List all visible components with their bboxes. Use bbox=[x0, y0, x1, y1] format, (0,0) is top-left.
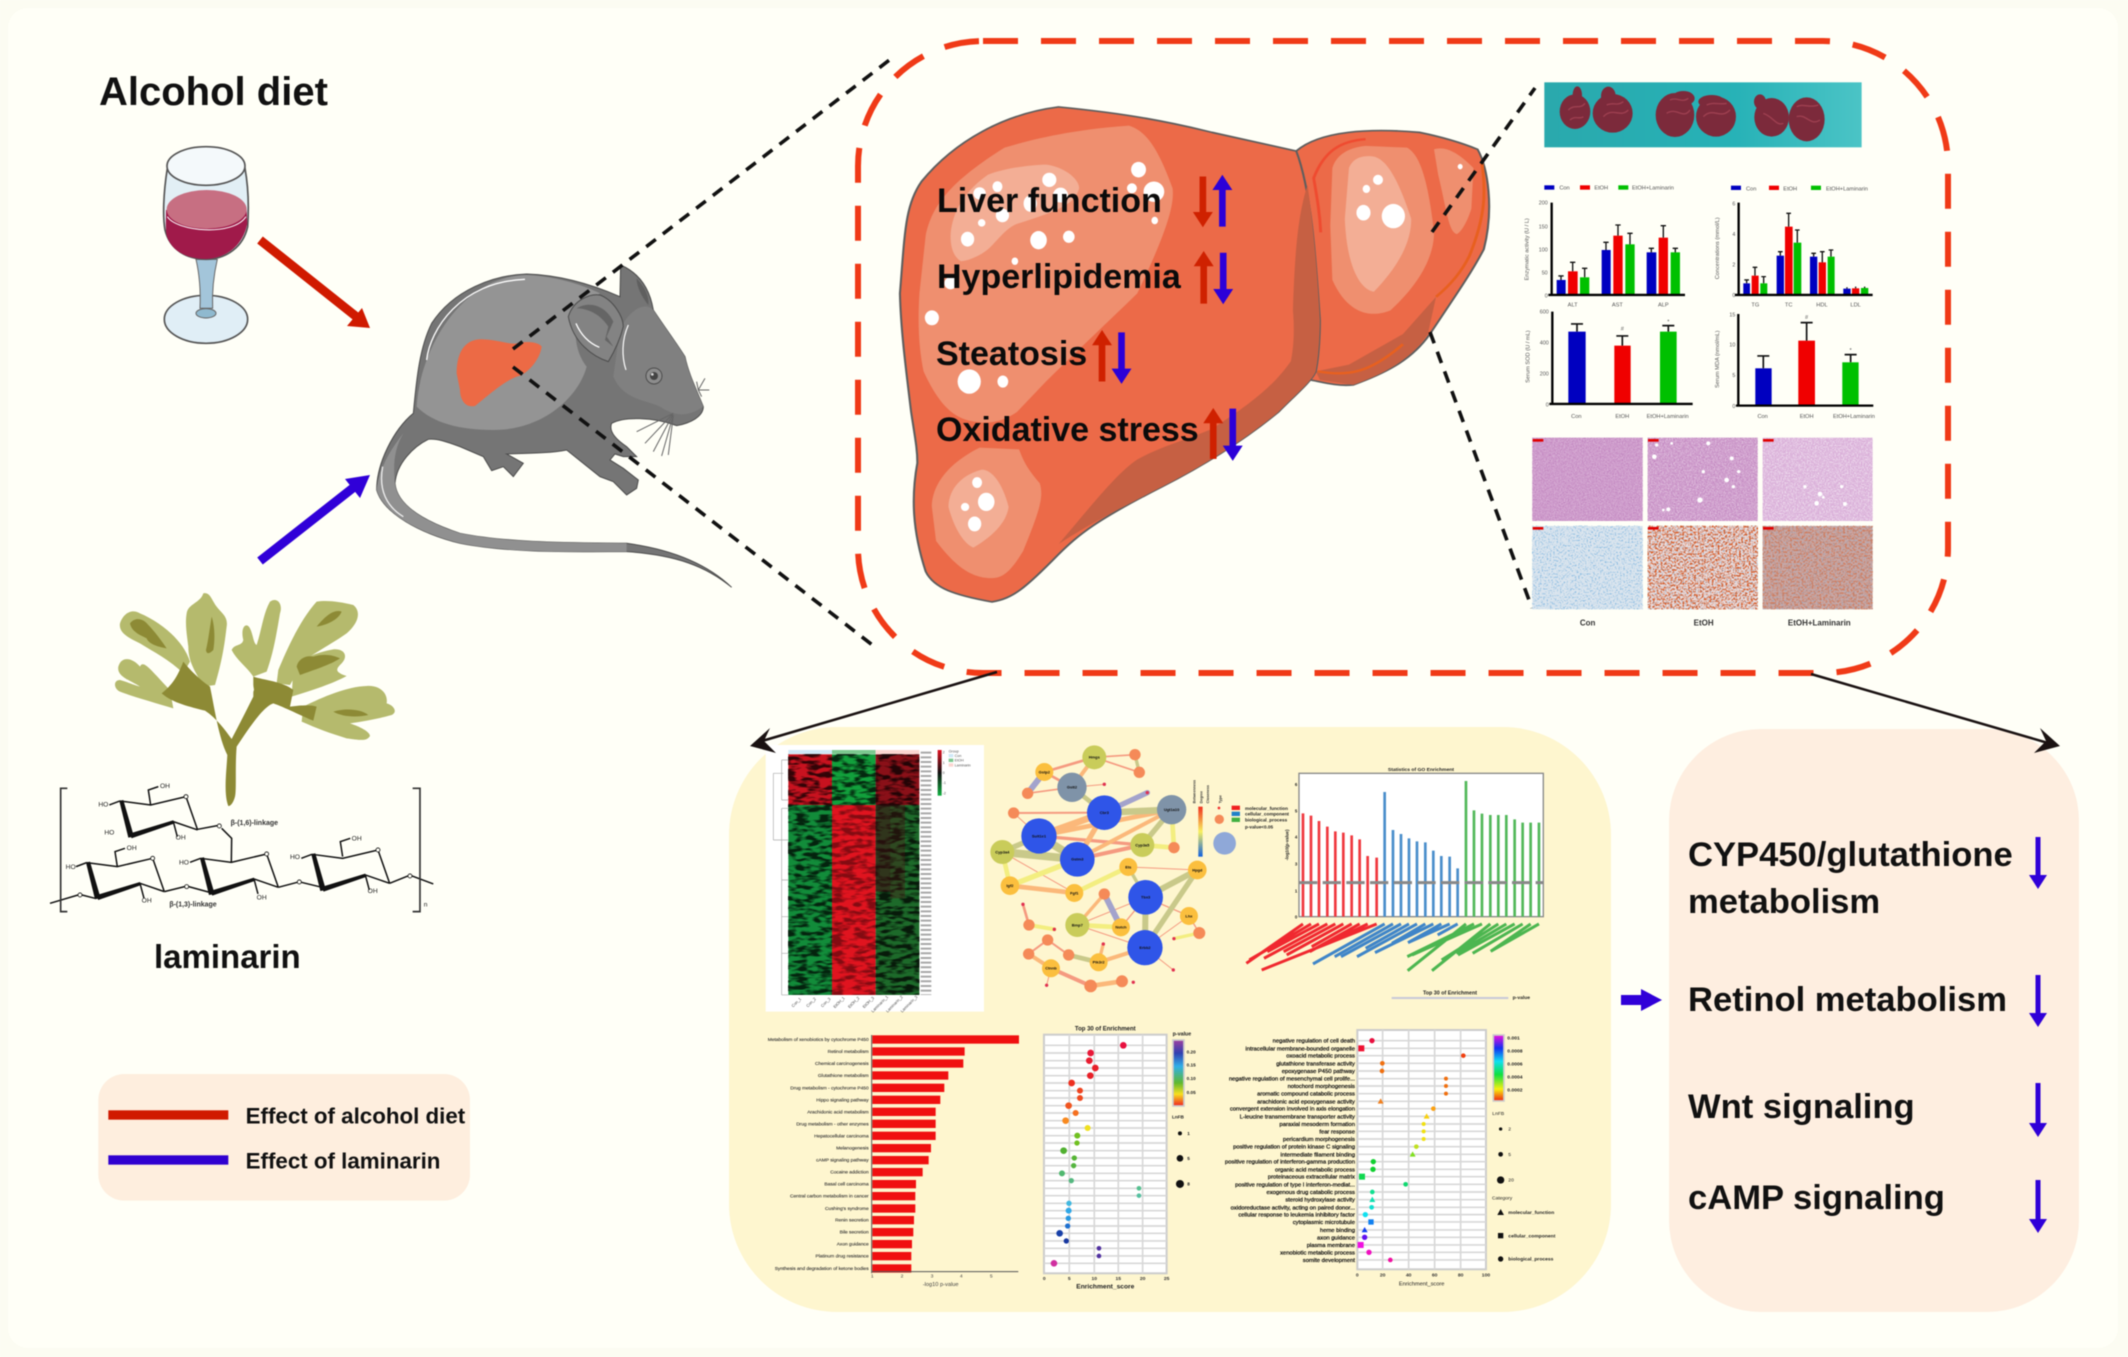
chart: enzymatic activity: Enzymatic activity (U / L) bbox=[1524, 218, 1530, 280]
chart: KEGG pathway bars: Axon guidance bbox=[837, 1242, 869, 1248]
chart: GO enrichment dot plot: biological_process bbox=[1508, 1257, 1554, 1263]
chart: KEGG pathway bars: 5 bbox=[990, 1273, 993, 1279]
chart: GO enrichment dot plot: 0.0008 bbox=[1507, 1048, 1523, 1054]
chart: GO enrichment statistics bars: 6 bbox=[1295, 782, 1298, 787]
panel: downregulated pathways bbox=[1669, 729, 2079, 1312]
chart: KEGG pathway bars: Melanogenesis bbox=[836, 1146, 869, 1152]
chart: KEGG pathway bars: 4 bbox=[960, 1273, 963, 1279]
chart: GO enrichment dot plot: arachidonic acid epoxygenase activity bbox=[1257, 1099, 1355, 1105]
chart: KEGG pathway bars: Bile secretion bbox=[840, 1230, 869, 1236]
chart: gene network: Cyp3a4 bbox=[995, 849, 1010, 854]
chart: KEGG enrichment dot plot: Enrichment_score bbox=[1076, 1284, 1135, 1291]
chart: KEGG pathway bars: Retinol metabolism bbox=[828, 1049, 869, 1055]
chemical structure: laminarin: OH bbox=[127, 845, 137, 852]
chart: enzymatic activity: Con bbox=[1559, 186, 1570, 192]
chart: KEGG pathway bars: Cocaine addiction bbox=[830, 1170, 869, 1176]
chart: GO enrichment dot plot: 40 bbox=[1406, 1273, 1412, 1279]
chart: GO enrichment dot plot: cytoplasmic microtubule bbox=[1293, 1220, 1355, 1226]
liver effect: Oxidative stress bbox=[936, 408, 1243, 461]
chemical structure: laminarin bbox=[50, 783, 433, 912]
chemical structure: laminarin: OH bbox=[160, 783, 170, 790]
chemical structure: laminarin: HO bbox=[179, 859, 189, 866]
chart: serum SOD: 600 bbox=[1540, 310, 1549, 316]
chart: KEGG enrichment dot plot bbox=[1043, 1027, 1196, 1291]
chemical structure: laminarin: β-(1,3)-linkage bbox=[169, 902, 217, 909]
chart: GO enrichment statistics bars: p-value bbox=[1513, 995, 1530, 1001]
chart: enzymatic activity: 50 bbox=[1542, 271, 1548, 277]
liver effect: Oxidative stress: Oxidative stress bbox=[936, 411, 1199, 449]
chart: gene network: Degree bbox=[1199, 791, 1203, 803]
chart: gene network: Type bbox=[1218, 795, 1222, 803]
chart: lipid concentrations: 0 bbox=[1732, 293, 1735, 299]
chart: lipid concentrations: LDL bbox=[1850, 302, 1861, 308]
chart: GO enrichment statistics bars: 4 bbox=[1295, 835, 1298, 840]
chart: enzymatic activity: ALP bbox=[1658, 302, 1669, 308]
chart: KEGG pathway bars: 3 bbox=[931, 1273, 934, 1279]
chart: GO enrichment dot plot: 100 bbox=[1482, 1273, 1490, 1279]
chemical structure: laminarin: HO bbox=[66, 864, 76, 871]
icon: mouse with liver bbox=[377, 265, 732, 587]
chart: GO enrichment statistics bars: 1 bbox=[1295, 889, 1298, 894]
chemical structure: laminarin: OH bbox=[368, 888, 378, 895]
chart: serum SOD bbox=[1525, 310, 1693, 420]
chart: gene network: Cbr3 bbox=[1100, 810, 1110, 815]
chart: GO enrichment dot plot: glutathione transferase activity bbox=[1276, 1061, 1355, 1067]
chemical structure: laminarin: OH bbox=[176, 835, 186, 842]
legend bbox=[98, 1074, 470, 1201]
chart: GO enrichment dot plot: somite development bbox=[1303, 1258, 1355, 1264]
icon: seaweed bbox=[115, 593, 395, 806]
chart: GO enrichment dot plot: convergent extension involved in axis elongation bbox=[1230, 1107, 1355, 1113]
illustration: enlarged liver bbox=[900, 107, 1489, 602]
chemical structure: laminarin: n bbox=[424, 902, 428, 909]
panel: liver zoom dashed box bbox=[858, 41, 1948, 673]
chart: KEGG pathway bars: Glutathione metabolism bbox=[818, 1073, 869, 1079]
photo: dissected livers bbox=[1544, 82, 1862, 147]
chart: enzymatic activity: 200 bbox=[1539, 201, 1548, 207]
chart: serum SOD: * bbox=[1667, 319, 1670, 325]
chart: GO enrichment dot plot: 80 bbox=[1458, 1273, 1464, 1279]
chart: GO enrichment dot plot: 20 bbox=[1508, 1178, 1514, 1184]
chart: KEGG pathway bars: Cushing's syndrome bbox=[825, 1206, 869, 1212]
text: Retinol metabolism: Retinol metabolism bbox=[1688, 981, 2007, 1019]
chart: gene network: Tbx3 bbox=[1141, 895, 1151, 900]
chart: KEGG enrichment dot plot: 0.20 bbox=[1187, 1049, 1196, 1054]
chart: GO enrichment statistics bars: p-value<0.05 bbox=[1245, 824, 1273, 829]
chart: GO enrichment dot plot: epoxygenase P450 pathway bbox=[1282, 1069, 1355, 1075]
chart: GO enrichment dot plot: negative regulation of cell death bbox=[1273, 1039, 1355, 1045]
arrow: omics to pathways bbox=[1621, 989, 1662, 1011]
chemical structure: laminarin: HO bbox=[104, 829, 114, 836]
chart: gene network bbox=[990, 745, 1240, 992]
chart: gene network: Gstp2 bbox=[1039, 769, 1051, 774]
chart: enzymatic activity: 0 bbox=[1545, 293, 1548, 299]
liver effect: Hyperlipidemia: Hyperlipidemia bbox=[937, 258, 1182, 296]
chart: lipid concentrations: HDL bbox=[1816, 302, 1828, 308]
chart: KEGG pathway bars: Basal cell carcinoma bbox=[824, 1182, 869, 1188]
chart: KEGG pathway bars: Arachidonic acid metabolism bbox=[807, 1109, 869, 1115]
chart: GO enrichment dot plot: proteinaceous extracellular matrix bbox=[1268, 1175, 1355, 1181]
chart: heatmap bbox=[766, 745, 984, 1013]
chart: GO enrichment dot plot: 20 bbox=[1380, 1273, 1386, 1279]
chart: KEGG pathway bars: Platinum drug resistance bbox=[816, 1254, 869, 1260]
chart: gene network: Hpgd bbox=[1192, 867, 1203, 872]
chart: KEGG pathway bars: cAMP signaling pathway bbox=[816, 1158, 869, 1164]
legend: Effect of alcohol diet bbox=[246, 1103, 466, 1128]
chart: KEGG enrichment dot plot: 0 bbox=[1043, 1276, 1046, 1282]
chart: enzymatic activity: 150 bbox=[1539, 224, 1548, 230]
chart: GO enrichment dot plot: pericardium morphogenesis bbox=[1283, 1137, 1355, 1143]
dashed zoom lines bbox=[513, 58, 1535, 647]
chart: KEGG enrichment dot plot: 8 bbox=[1187, 1182, 1190, 1187]
black arrow to omics panel bbox=[750, 672, 997, 753]
chart: GO enrichment statistics bars: cellular_component bbox=[1245, 812, 1289, 817]
black arrow to pathway panel bbox=[1811, 674, 2060, 753]
text: CYP450/glutathione metabolism bbox=[1688, 836, 2013, 921]
chart: GO enrichment dot plot: Enrichment_score bbox=[1399, 1281, 1444, 1287]
chart: serum SOD: 200 bbox=[1540, 371, 1549, 377]
arrow: laminarin to mouse bbox=[260, 475, 370, 561]
chart: serum SOD: EtOH+Laminarin bbox=[1647, 414, 1689, 420]
chart: KEGG enrichment dot plot: 5 bbox=[1187, 1156, 1190, 1161]
chart: lipid concentrations: 6 bbox=[1732, 201, 1735, 207]
chart: KEGG pathway bars: 2 bbox=[901, 1273, 904, 1279]
chart: KEGG pathway bars: Hippo signaling pathway bbox=[816, 1097, 869, 1103]
chart: heatmap: 0 bbox=[943, 771, 945, 775]
chart: enzymatic activity bbox=[1524, 185, 1685, 308]
heading: Alcohol diet: Alcohol diet bbox=[99, 70, 328, 114]
chart: KEGG pathway bars: Drug metabolism - other enzymes bbox=[796, 1121, 869, 1127]
chart: GO enrichment dot plot: cellular response to leukemia inhibitory factor bbox=[1238, 1213, 1355, 1219]
chart: enzymatic activity: EtOH bbox=[1594, 186, 1608, 192]
chart: GO enrichment statistics bars bbox=[1245, 767, 1543, 1001]
chart: GO enrichment dot plot: positive regulation of protein kinase C signaling bbox=[1233, 1145, 1355, 1151]
chart: GO enrichment dot plot: negative regulation of mesenchymal cell prolife... bbox=[1229, 1077, 1355, 1083]
chart: serum SOD: # bbox=[1621, 327, 1625, 333]
histology images: EtOH bbox=[1694, 618, 1714, 627]
chart: serum MDA: Serum MDA (nmol/mL) bbox=[1715, 330, 1721, 388]
chart: heatmap: -1 bbox=[943, 781, 946, 785]
chart: serum MDA: 10 bbox=[1729, 342, 1735, 348]
chart: serum MDA: EtOH bbox=[1800, 414, 1814, 420]
chemical structure: laminarin: OH bbox=[142, 897, 152, 904]
chart: heatmap: Laminarin_1 bbox=[870, 994, 890, 1013]
chart: enzymatic activity: EtOH+Laminarin bbox=[1632, 186, 1674, 192]
chart: GO enrichment dot plot: positive regulation of interferon-gamma production bbox=[1225, 1160, 1355, 1166]
chart: KEGG enrichment dot plot: 0.15 bbox=[1187, 1063, 1196, 1068]
chart: heatmap: EtOH_1 bbox=[832, 995, 846, 1009]
chart: heatmap: Laminarin bbox=[955, 763, 971, 767]
chart: KEGG pathway bars: 1 bbox=[871, 1273, 874, 1279]
chart: KEGG enrichment dot plot: p-value bbox=[1173, 1031, 1191, 1037]
chart: gene network: Igf2 bbox=[1006, 883, 1014, 888]
chart: lipid concentrations: EtOH bbox=[1783, 186, 1797, 192]
chart: GO enrichment dot plot: cellular_component bbox=[1508, 1233, 1556, 1239]
chemical structure: laminarin: OH bbox=[352, 836, 362, 843]
chart: GO enrichment dot plot: 0.0006 bbox=[1507, 1061, 1523, 1067]
arrow: Wnt down bbox=[2029, 1083, 2047, 1137]
chemical structure: laminarin: HO bbox=[290, 854, 300, 861]
chart: lipid concentrations: TG bbox=[1751, 302, 1759, 308]
arrow: Retinol down bbox=[2029, 975, 2047, 1027]
histology images bbox=[1532, 438, 1873, 627]
chart: gene network: Gstm3 bbox=[1071, 857, 1084, 862]
chart: KEGG enrichment dot plot: 0.05 bbox=[1187, 1090, 1196, 1095]
chart: gene network: Pik3r2 bbox=[1093, 960, 1105, 965]
chart: KEGG pathway bars: Synthesis and degradation of ketone bodies bbox=[775, 1266, 869, 1272]
chart: KEGG enrichment dot plot: 10 bbox=[1092, 1276, 1097, 1282]
chart: serum MDA: # bbox=[1805, 315, 1809, 321]
chart: GO enrichment statistics bars: -log10(p-value) bbox=[1284, 829, 1289, 860]
chart: KEGG enrichment dot plot: 15 bbox=[1116, 1276, 1121, 1282]
chart: GO enrichment dot plot: intermediate filament binding bbox=[1280, 1152, 1355, 1158]
heading: laminarin: laminarin bbox=[154, 938, 301, 975]
chart: GO enrichment dot plot: 0.0004 bbox=[1507, 1074, 1523, 1080]
chart: serum MDA: 15 bbox=[1729, 312, 1735, 318]
chart: heatmap: EtOH bbox=[955, 759, 964, 763]
chart: GO enrichment dot plot: L-leucine transmembrane transporter activity bbox=[1240, 1114, 1355, 1120]
chart: KEGG pathway bars: -log10 p-value bbox=[923, 1282, 959, 1288]
chart: gene network: Bmp7 bbox=[1072, 922, 1084, 927]
chart: GO enrichment dot plot: heme binding bbox=[1320, 1228, 1355, 1234]
chart: GO enrichment dot plot: positive regulation of type I interferon-mediat... bbox=[1235, 1182, 1355, 1188]
chart: GO enrichment statistics bars: molecular_function bbox=[1245, 806, 1288, 811]
chart: KEGG pathway bars: Metabolism of xenobiotics by cytochrome P450 bbox=[768, 1037, 869, 1043]
chart: KEGG enrichment dot plot: LnFB bbox=[1172, 1115, 1184, 1120]
chart: GO enrichment statistics bars: 5 bbox=[1295, 808, 1298, 813]
icon: wine glass bbox=[164, 147, 248, 343]
liver effect: Steatosis bbox=[936, 330, 1131, 384]
chart: gene network: Lhx bbox=[1185, 913, 1193, 918]
chemical structure: laminarin: β-(1,6)-linkage bbox=[231, 820, 278, 827]
chart: lipid concentrations: EtOH+Laminarin bbox=[1826, 186, 1868, 192]
chart: GO enrichment dot plot: organic acid metabolic process bbox=[1275, 1167, 1355, 1173]
histology images: EtOH+Laminarin bbox=[1788, 618, 1851, 627]
chart: GO enrichment dot plot: 5 bbox=[1508, 1152, 1511, 1158]
chart: KEGG enrichment dot plot: 5 bbox=[1068, 1276, 1071, 1282]
chart: GO enrichment dot plot: exogenous drug catabolic process bbox=[1267, 1190, 1355, 1196]
chart: lipid concentrations bbox=[1715, 186, 1873, 308]
chart: KEGG pathway bars: Hepatocellular carcinoma bbox=[814, 1133, 869, 1139]
chart: GO enrichment dot plot: axon guidance bbox=[1317, 1235, 1355, 1241]
chart: heatmap: Group bbox=[949, 749, 959, 753]
chart: GO enrichment dot plot: 2 bbox=[1508, 1127, 1511, 1133]
chart: GO enrichment dot plot: molecular_function bbox=[1508, 1210, 1554, 1216]
chart: gene network: Sult1e1 bbox=[1032, 833, 1047, 838]
chart: gene network: Cyp3a5 bbox=[1135, 842, 1150, 847]
chart: enzymatic activity: ALT bbox=[1568, 302, 1578, 308]
chart: GO enrichment dot plot: fear response bbox=[1319, 1129, 1355, 1135]
arrow: cAMP down bbox=[2029, 1180, 2047, 1233]
chart: GO enrichment statistics bars: Statistics of GO Enrichment bbox=[1388, 767, 1454, 773]
chart: lipid concentrations: Concentrations (mmol/L) bbox=[1715, 217, 1721, 279]
chart: serum SOD: 0 bbox=[1546, 402, 1549, 408]
chart: gene network: Hmgs bbox=[1089, 755, 1101, 760]
chart: GO enrichment statistics bars: 3 bbox=[1295, 861, 1298, 866]
chart: GO enrichment statistics bars: biological_process bbox=[1245, 818, 1288, 823]
chart: GO enrichment dot plot: 0 bbox=[1356, 1273, 1359, 1279]
liver effect: Liver function bbox=[937, 175, 1232, 227]
chart: GO enrichment dot plot: Category bbox=[1492, 1195, 1513, 1201]
chart: KEGG enrichment dot plot: 0.10 bbox=[1187, 1076, 1196, 1081]
chart: KEGG pathway bars bbox=[768, 1035, 1019, 1288]
chart: gene network: Ets bbox=[1125, 864, 1132, 869]
text: CYP450/glutathione metabolism: metabolism bbox=[1688, 883, 1880, 921]
text: Wnt signaling: Wnt signaling bbox=[1688, 1088, 1915, 1126]
chart: heatmap: Con_1 bbox=[790, 996, 803, 1008]
chart: lipid concentrations: TC bbox=[1785, 302, 1792, 308]
chart: GO enrichment dot plot: paraxial mesoderm formation bbox=[1279, 1122, 1355, 1128]
chart: heatmap: Con_2 bbox=[805, 996, 817, 1008]
liver effect: Hyperlipidemia bbox=[937, 251, 1233, 304]
chart: enzymatic activity: 100 bbox=[1539, 247, 1548, 253]
chart: lipid concentrations: Con bbox=[1746, 186, 1756, 192]
chart: serum SOD: 400 bbox=[1540, 341, 1549, 347]
chart: serum MDA: Con bbox=[1757, 414, 1768, 420]
chart: KEGG enrichment dot plot: Top 30 of Enrichment bbox=[1075, 1027, 1136, 1033]
text: CYP450/glutathione metabolism: CYP450/glutathione bbox=[1688, 836, 2013, 874]
chart: heatmap: -2 bbox=[943, 791, 946, 795]
chart: heatmap: Con_3 bbox=[820, 996, 832, 1008]
chart: KEGG pathway bars: Drug metabolism - cytochrome P450 bbox=[790, 1085, 869, 1091]
chart: GO enrichment dot plot: xenobiotic metabolic process bbox=[1280, 1250, 1355, 1256]
chart: gene network: Ctnnb bbox=[1045, 966, 1057, 971]
legend: Effect of laminarin bbox=[246, 1148, 440, 1173]
chart: KEGG pathway bars: Central carbon metabolism in cancer bbox=[790, 1194, 869, 1200]
chart: serum MDA bbox=[1715, 312, 1875, 420]
liver effect: Steatosis: Steatosis bbox=[936, 335, 1087, 373]
chart: GO enrichment statistics bars: 0 bbox=[1295, 914, 1298, 919]
chart: serum SOD: Serum SOD (U / mL) bbox=[1525, 330, 1531, 383]
chart: serum MDA: 0 bbox=[1732, 404, 1735, 410]
chart: gene network: Fgf1 bbox=[1070, 890, 1079, 895]
chart: serum SOD: Con bbox=[1571, 414, 1582, 420]
histology images: Con bbox=[1580, 618, 1596, 627]
chart: gene network: Erbb2 bbox=[1139, 945, 1151, 950]
chart: gene network: Betweenness bbox=[1192, 780, 1196, 803]
chart: GO enrichment dot plot: oxidoreductase activity, acting on paired donor... bbox=[1231, 1205, 1355, 1211]
chart: heatmap: Laminarin_2 bbox=[885, 994, 904, 1013]
chart: serum MDA: * bbox=[1850, 348, 1853, 354]
chart: GO enrichment dot plot bbox=[1225, 1030, 1556, 1287]
liver effect: Liver function: Liver function bbox=[937, 182, 1162, 220]
chart: GO enrichment dot plot: 60 bbox=[1432, 1273, 1438, 1279]
chart: serum MDA: EtOH+Laminarin bbox=[1833, 414, 1875, 420]
chemical structure: laminarin: OH bbox=[257, 895, 267, 902]
chart: KEGG enrichment dot plot: 25 bbox=[1164, 1276, 1170, 1282]
chart: gene network: Notch bbox=[1115, 925, 1127, 930]
arrow: alcohol to mouse bbox=[260, 240, 370, 328]
chart: lipid concentrations: 4 bbox=[1732, 232, 1735, 238]
panel: transcriptomics bbox=[729, 727, 1611, 1312]
chart: GO enrichment dot plot: aromatic compound catabolic process bbox=[1257, 1092, 1355, 1098]
chart: KEGG enrichment dot plot: 20 bbox=[1140, 1276, 1146, 1282]
chart: GO enrichment dot plot: plasma membrane bbox=[1307, 1243, 1355, 1249]
chart: gene network: Closeness bbox=[1206, 785, 1210, 803]
chart: gene network: Gstt2 bbox=[1067, 785, 1078, 790]
chart: GO enrichment dot plot: notochord morphogenesis bbox=[1288, 1084, 1355, 1090]
chart: GO enrichment dot plot: oxoacid metabolic process bbox=[1286, 1054, 1355, 1060]
chart: GO enrichment dot plot: LnFB bbox=[1492, 1111, 1505, 1117]
chemical structure: laminarin: HO bbox=[98, 801, 108, 808]
chart: serum SOD: EtOH bbox=[1615, 414, 1629, 420]
chart: heatmap: EtOH_3 bbox=[861, 995, 876, 1009]
chart: KEGG enrichment dot plot: 1 bbox=[1187, 1131, 1190, 1136]
arrow: CYP450 down bbox=[2029, 837, 2047, 889]
chart: heatmap: Con bbox=[955, 754, 961, 758]
chart: GO enrichment dot plot: 0.0002 bbox=[1507, 1087, 1523, 1093]
chart: GO enrichment dot plot: intracellular membrane-bounded organelle bbox=[1245, 1046, 1355, 1052]
chart: GO enrichment statistics bars: Top 30 of Enrichment bbox=[1423, 991, 1477, 997]
chart: KEGG pathway bars: Chemical carcinogenesis bbox=[815, 1061, 869, 1067]
chart: heatmap: 2 bbox=[943, 750, 945, 754]
chart: gene network: Ugt1a10 bbox=[1164, 807, 1180, 812]
chart: KEGG pathway bars: Renin secretion bbox=[835, 1218, 869, 1224]
chart: GO enrichment dot plot: 0.001 bbox=[1507, 1035, 1520, 1041]
chart: lipid concentrations: 2 bbox=[1732, 262, 1735, 268]
chart: heatmap: Laminarin_3 bbox=[899, 994, 919, 1013]
chart: heatmap: 1 bbox=[943, 761, 945, 765]
chart: GO enrichment dot plot: steroid hydroxylase activity bbox=[1285, 1198, 1355, 1204]
text: cAMP signaling: cAMP signaling bbox=[1688, 1179, 1945, 1217]
chart: heatmap: EtOH_2 bbox=[847, 995, 861, 1009]
chart: serum MDA: 5 bbox=[1732, 373, 1735, 379]
chart: enzymatic activity: AST bbox=[1612, 302, 1623, 308]
